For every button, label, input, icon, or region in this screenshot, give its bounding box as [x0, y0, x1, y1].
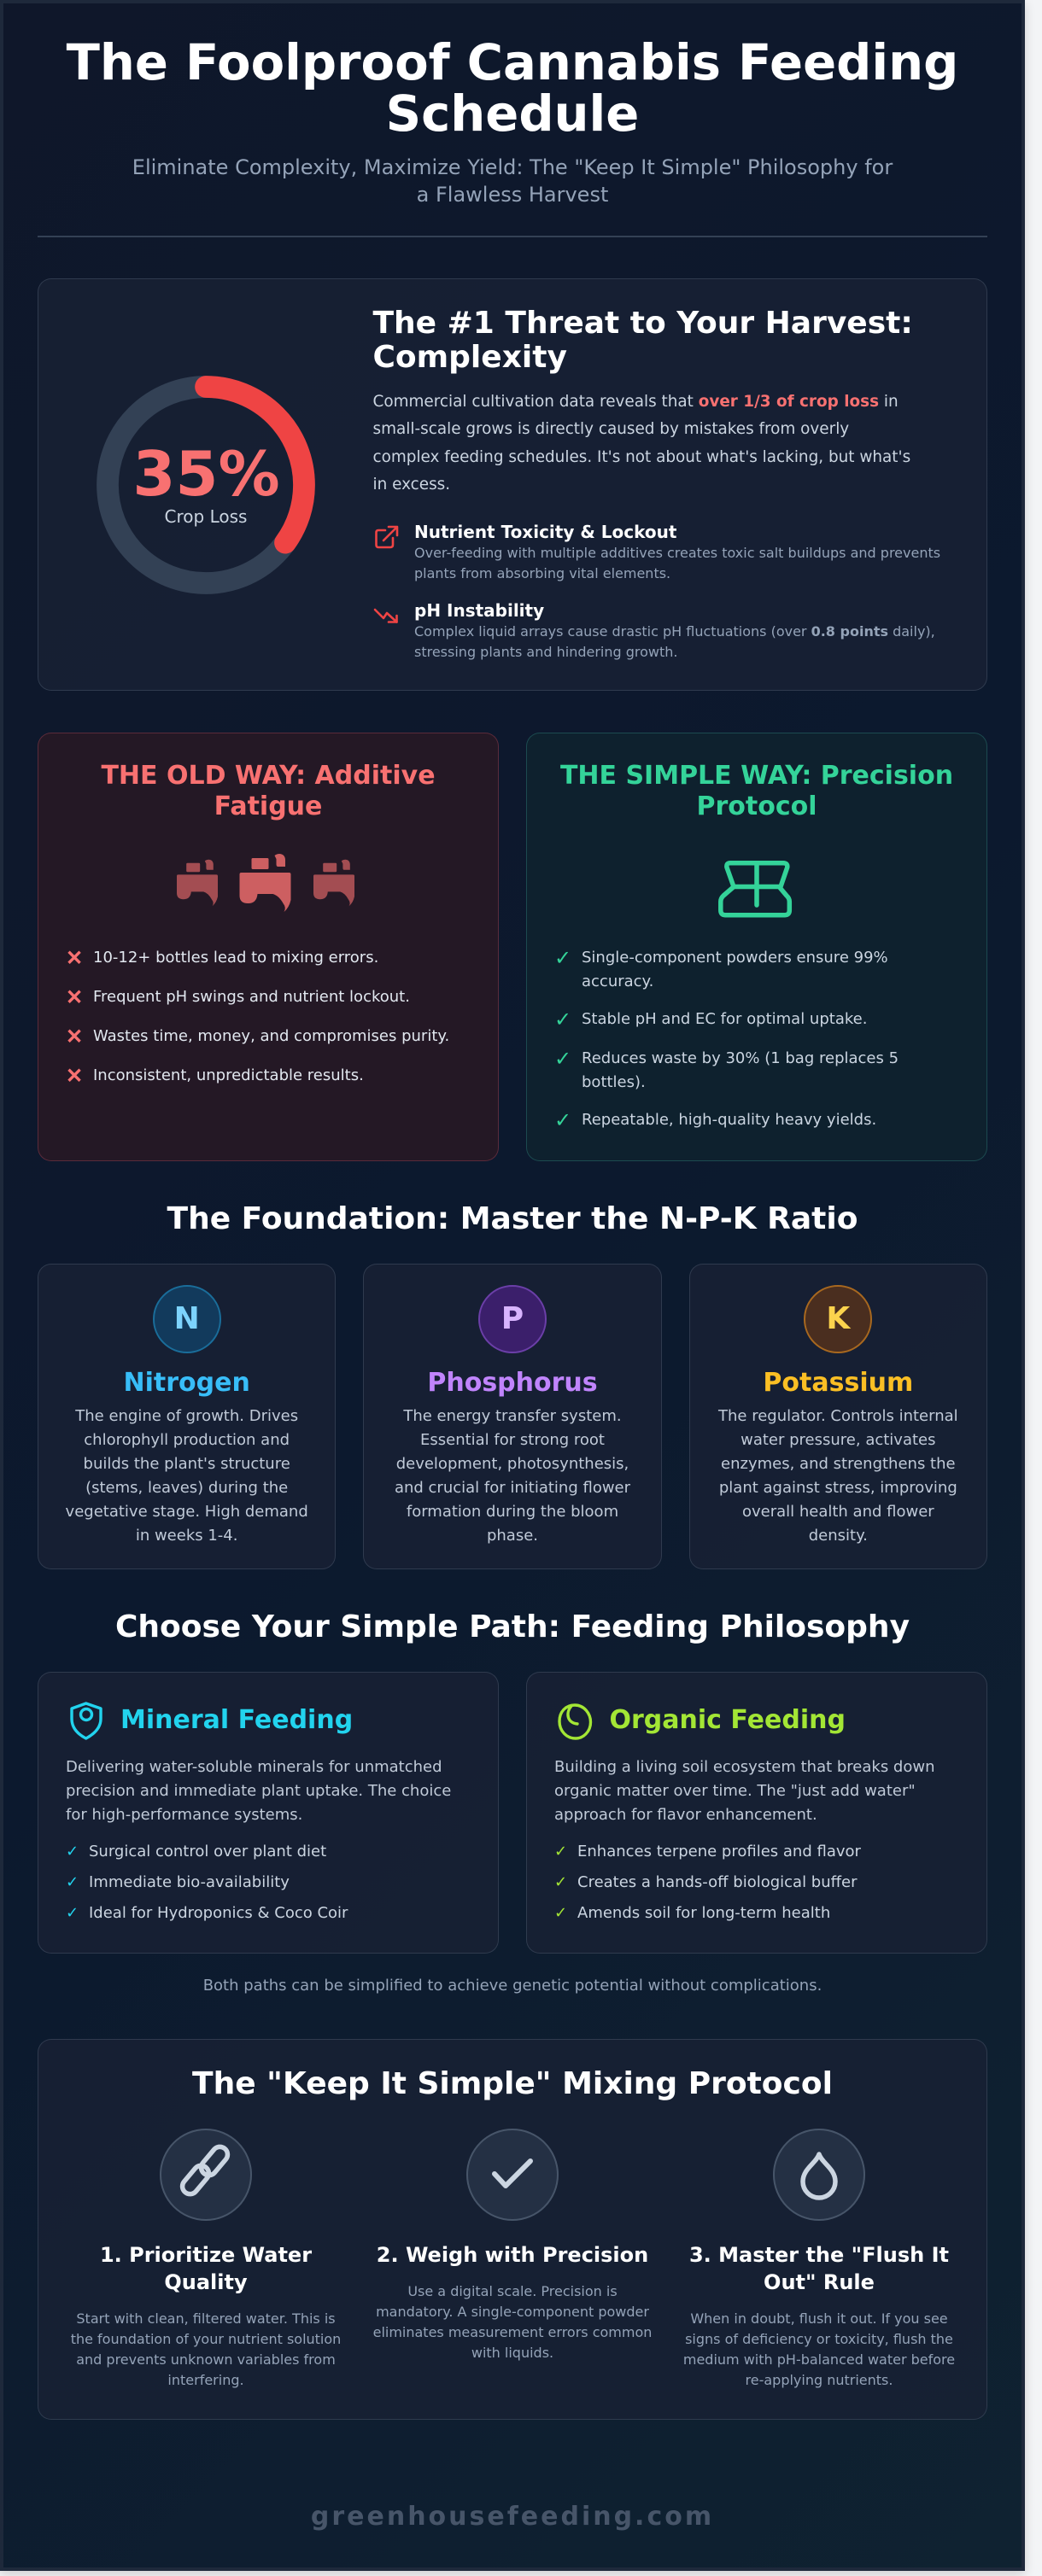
text: nutrient toxicity detail: plants from absorbing vital elements.: [414, 565, 670, 581]
list: simple way benefits: ✓: [554, 946, 571, 970]
list: organic benefits: Enhances terpene profiles and flavor: [577, 1843, 861, 1860]
label: potassium: Potassium: [763, 1368, 913, 1398]
list: organic benefits: Creates a hands-off biological buffer: [577, 1873, 858, 1891]
text: threat description: small-scale grows is directly caused by mistakes from overly: [372, 420, 849, 438]
list: old way drawbacks: Wastes time, money, and compromises purity.: [93, 1027, 449, 1045]
heading: old way: Fatigue: [214, 791, 322, 821]
text: nitrogen description: builds the plant's structure: [84, 1455, 290, 1473]
text: nitrogen description: vegetative stage. High demand: [66, 1503, 308, 1521]
heading: threat: The #1 Threat to Your Harvest:: [372, 306, 913, 341]
panel: mineral feeding: [38, 1672, 499, 1954]
text: phosphorus description: [395, 1407, 630, 1545]
icon: N badge: N: [174, 1301, 200, 1336]
text: pH instability detail: [414, 623, 935, 660]
text: nutrient toxicity detail: [414, 545, 940, 581]
text: step 2 detail: [373, 2283, 652, 2361]
donut chart: 35% crop loss: 35%: [132, 438, 280, 510]
text: step 1 detail: [71, 2310, 341, 2388]
step 2: [373, 2129, 652, 2361]
list: old way drawbacks: ✕: [66, 946, 83, 970]
list: old way drawbacks: Inconsistent, unpredictable results.: [93, 1066, 364, 1084]
label: phosphorus: Phosphorus: [427, 1368, 598, 1398]
label: step 2: 2. Weigh with Precision: [377, 2243, 648, 2267]
subtitle: Eliminate Complexity, Maximize Yield: The "Keep It Simple" Philosophy for: [132, 155, 893, 179]
text: potassium description: water pressure, activates: [741, 1431, 936, 1449]
label: step 3: [689, 2243, 949, 2294]
text: nitrogen description: [66, 1407, 308, 1545]
list: old way drawbacks: 10-12+ bottles lead to mixing errors.: [93, 949, 378, 967]
text: phosphorus description: formation during the bloom: [407, 1503, 618, 1521]
donut chart: 35% crop loss: [97, 376, 315, 594]
list: mineral benefits: Surgical control over plant diet: [89, 1843, 326, 1860]
panel: organic feeding: [526, 1672, 987, 1954]
label: step 1: 1. Prioritize Water: [100, 2243, 312, 2267]
text: mineral description: Delivering water-soluble minerals for unmatched: [66, 1758, 442, 1776]
text: step 1 detail: and prevents unknown variables from: [76, 2351, 336, 2368]
text: threat description: in excess.: [372, 476, 450, 494]
text: mineral description: for high-performance systems.: [66, 1806, 302, 1824]
text: organic description: organic matter over time. The "just add water": [554, 1782, 916, 1800]
text: phosphorus description: development, photosynthesis,: [396, 1455, 629, 1473]
heading: old way: [101, 761, 436, 821]
list: organic benefits: ✓: [554, 1904, 567, 1922]
list: simple way benefits: accuracy.: [582, 973, 653, 990]
heading: simple way: [560, 761, 953, 821]
text: organic description: approach for flavor enhancement.: [554, 1806, 817, 1824]
text: pH instability detail: stressing plants and hindering growth.: [414, 644, 678, 660]
text: mineral description: precision and immediate plant uptake. The choice: [66, 1782, 451, 1800]
text: nitrogen description: chlorophyll production and: [84, 1431, 290, 1449]
text: step 2 detail: eliminates measurement errors common: [373, 2324, 652, 2340]
label: step 3: 3. Master the "Flush It: [689, 2243, 949, 2267]
text: nitrogen description: The engine of growth. Drives: [75, 1407, 298, 1425]
icon: N badge: [153, 1285, 221, 1353]
text: nitrogen description: (stems, leaves) during the: [85, 1479, 288, 1497]
icon: K badge: [804, 1285, 872, 1353]
text: potassium description: enzymes, and strengthens the: [721, 1455, 956, 1473]
label: nitrogen: Nitrogen: [123, 1368, 250, 1398]
list: organic benefits: Amends soil for long-term health: [577, 1904, 830, 1922]
icon: P badge: [478, 1285, 547, 1353]
panel: phosphorus: [363, 1264, 662, 1569]
title: [67, 34, 958, 143]
text: organic description: [554, 1758, 934, 1824]
panel: potassium: [689, 1264, 987, 1569]
list: organic benefits: [554, 1843, 861, 1922]
list: old way drawbacks: Frequent pH swings and nutrient lockout.: [93, 988, 410, 1006]
text: step 2 detail: with liquids.: [471, 2345, 553, 2361]
step 3: [683, 2129, 955, 2388]
heading: N-P-K foundation: The Foundation: Master the N-P-K Ratio: [167, 1201, 858, 1236]
icon: shield: [70, 1702, 102, 1740]
text: step 2 detail: Use a digital scale. Precision is: [407, 2283, 618, 2299]
heading: simple way: Protocol: [696, 791, 817, 821]
list: mineral benefits: Immediate bio-availability: [89, 1873, 290, 1891]
text: step 1 detail: Start with clean, filtered water. This is: [76, 2310, 336, 2327]
label: organic feeding: Organic Feeding: [610, 1705, 846, 1735]
text: phosphorus description: and crucial for initiating flower: [395, 1479, 630, 1497]
icon: seed swirl: [558, 1703, 593, 1740]
icon: trending down: [374, 608, 398, 623]
list: old way drawbacks: ✕: [66, 1064, 83, 1088]
icon: check mark: [466, 2129, 559, 2221]
icon: three bottles: [177, 854, 354, 912]
title: The Foolproof Cannabis Feeding: [67, 34, 958, 91]
label: step 3: Out" Rule: [764, 2270, 875, 2294]
heading: mixing protocol: The "Keep It Simple" Mixing Protocol: [192, 2066, 833, 2101]
text: potassium description: The regulator. Controls internal: [718, 1407, 958, 1425]
text: phosphorus description: The energy transfer system.: [403, 1407, 622, 1425]
icon: powder bag: [718, 861, 793, 917]
text: step 3 detail: re-applying nutrients.: [746, 2372, 893, 2388]
list: simple way benefits: Reduces waste by 30% (1 bag replaces 5: [582, 1049, 899, 1067]
list: simple way benefits: ✓: [554, 1008, 571, 1031]
list: simple way benefits: Single-component powders ensure 99%: [582, 949, 888, 967]
text: step 1 detail: interfering.: [167, 2372, 244, 2388]
panel: nitrogen: [38, 1264, 336, 1569]
text: pH instability detail: Complex liquid arrays cause drastic pH fluctuations (over 0.8 points daily),: [414, 623, 935, 640]
label: mineral feeding: Mineral Feeding: [120, 1705, 353, 1735]
text: step 3 detail: [683, 2310, 955, 2388]
footer: website: greenhousefeeding.com: [311, 2502, 714, 2532]
text: threat description: Commercial cultivation data reveals that over 1/3 of crop loss in: [372, 393, 899, 411]
icon: external arrow: [375, 526, 398, 548]
title: Schedule: [386, 85, 639, 143]
list: organic benefits: ✓: [554, 1873, 567, 1891]
text: nutrient toxicity detail: Over-feeding with multiple additives creates toxic salt buildups and prevents: [414, 545, 940, 561]
heading: old way: THE OLD WAY: Additive: [101, 761, 436, 791]
text: potassium description: plant against stress, improving: [719, 1479, 957, 1497]
text: phosphorus description: phase.: [487, 1527, 538, 1545]
text: step 3 detail: When in doubt, flush it out. If you see: [690, 2310, 948, 2327]
icon: P badge: P: [501, 1301, 524, 1336]
step 1: [71, 2129, 341, 2388]
list: old way drawbacks: ✕: [66, 1025, 83, 1049]
list: mineral benefits: Ideal for Hydroponics & Coco Coir: [89, 1904, 348, 1922]
panel: the old way: [38, 733, 499, 1161]
text: step 3 detail: signs of deficiency or toxicity, flush the: [685, 2331, 953, 2347]
list: mineral benefits: ✓: [66, 1843, 79, 1860]
label: pH instability: pH Instability: [414, 600, 544, 621]
icon: chain link: [160, 2129, 252, 2221]
text: phosphorus description: Essential for strong root: [420, 1431, 605, 1449]
list: old way drawbacks: ✕: [66, 985, 83, 1009]
subtitle: [132, 155, 893, 207]
list: simple way benefits: Repeatable, high-quality heavy yields.: [582, 1111, 876, 1129]
text: step 2 detail: mandatory. A single-component powder: [376, 2304, 649, 2320]
list: mineral benefits: ✓: [66, 1873, 79, 1891]
panel: the simple way: [526, 733, 987, 1161]
list: simple way benefits: Stable pH and EC for optimal uptake.: [582, 1010, 867, 1028]
label: step 1: Quality: [164, 2270, 248, 2294]
list: mineral benefits: ✓: [66, 1904, 79, 1922]
list: organic benefits: ✓: [554, 1843, 567, 1860]
text: potassium description: overall health and flower: [742, 1503, 934, 1521]
list: simple way benefits: ✓: [554, 1108, 571, 1132]
heading: simple way: THE SIMPLE WAY: Precision: [560, 761, 953, 791]
item: nutrient toxicity: [375, 522, 940, 581]
text: organic description: Building a living soil ecosystem that breaks down: [554, 1758, 934, 1776]
list: simple way benefits: [554, 946, 899, 1132]
text: threat description: [372, 393, 910, 494]
text: mineral description: [66, 1758, 451, 1824]
heading: feeding philosophy: Choose Your Simple Path: Feeding Philosophy: [115, 1609, 910, 1644]
heading: threat: Complexity: [372, 340, 567, 375]
text: step 1 detail: the foundation of your nutrient solution: [71, 2331, 341, 2347]
text: nitrogen description: in weeks 1-4.: [136, 1527, 237, 1545]
list: simple way benefits: ✓: [554, 1047, 571, 1071]
list: old way drawbacks: [66, 946, 449, 1088]
item: pH instability: [374, 600, 935, 660]
icon: K badge: K: [826, 1301, 850, 1336]
donut chart: 35% crop loss: Crop Loss: [165, 506, 247, 527]
label: nutrient toxicity: Nutrient Toxicity & Lockout: [414, 522, 676, 542]
text: threat description: complex feeding schedules. It's not about what's lacking, but what's: [372, 448, 910, 466]
text: note: Both paths can be simplified to achieve genetic potential without complications.: [203, 1977, 822, 1995]
list: simple way benefits: bottles).: [582, 1073, 646, 1091]
panel: mixing protocol: [38, 2039, 987, 2420]
label: step 1: [100, 2243, 313, 2294]
icon: water drop: [773, 2129, 865, 2221]
panel: the #1 threat: [38, 278, 987, 691]
text: potassium description: density.: [809, 1527, 868, 1545]
list: mineral benefits: [66, 1843, 348, 1922]
subtitle: a Flawless Harvest: [417, 183, 608, 207]
text: step 3 detail: medium with pH-balanced water before: [683, 2351, 955, 2368]
text: potassium description: [717, 1407, 958, 1545]
heading: threat: [372, 306, 913, 375]
